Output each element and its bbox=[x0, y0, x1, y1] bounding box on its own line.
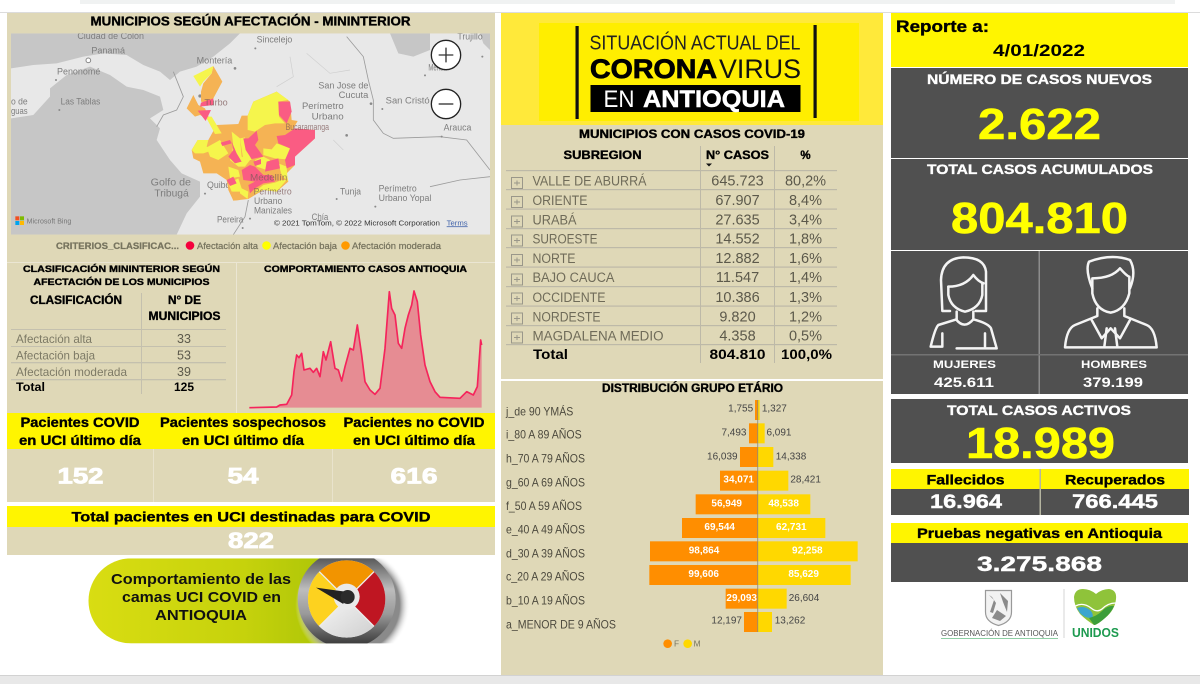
panel: casos acumulados: TOTAL CASOS ACUMULADOS bbox=[927, 162, 1153, 177]
heading: classification: CLASIFICACIÓN MININTERIOR SEGÚN bbox=[23, 263, 220, 275]
chart: age pyramid: 14,338 bbox=[776, 451, 807, 462]
area chart: daily cases bbox=[249, 291, 482, 408]
chart: age pyramid: 28,421 bbox=[790, 474, 821, 485]
table: municipios by class: 125 bbox=[174, 380, 194, 394]
map of Antioquia: guas bbox=[11, 106, 28, 116]
table: subregiones: 1,4% bbox=[789, 270, 822, 286]
panel: pruebas negativas: Pruebas negativas en Antioquia bbox=[917, 525, 1162, 541]
chart: age pyramid: 56,949 bbox=[711, 498, 742, 509]
map of Antioquia: Sincelejo bbox=[257, 35, 292, 45]
chart: age pyramid: d_30 A 39 AÑOS bbox=[506, 547, 585, 560]
table: subregiones: 1,2% bbox=[789, 310, 822, 326]
table: subregiones: ORIENTE bbox=[532, 193, 588, 208]
chart: age pyramid: 7,493 bbox=[721, 427, 747, 438]
map of Antioquia: Las Tablas bbox=[61, 96, 101, 106]
chart: age pyramid: 12,197 bbox=[711, 616, 742, 627]
zoom in button bbox=[431, 40, 461, 70]
map legend: Afectación baja bbox=[273, 241, 338, 252]
heading: map title: MUNICIPIOS SEGÚN AFECTACIÓN - MININTERIOR bbox=[90, 14, 411, 28]
table: subregiones: OCCIDENTE bbox=[532, 290, 606, 305]
map legend: Afectación moderada bbox=[352, 241, 442, 252]
heading: chart: COMPORTAMIENTO CASOS ANTIOQUIA bbox=[264, 264, 467, 275]
panel: gender split bbox=[891, 251, 1188, 394]
icon: coat of arms bbox=[986, 590, 1012, 626]
chart: age pyramid: 69,544 bbox=[704, 522, 735, 533]
table: subregiones: NORDESTE bbox=[532, 310, 600, 324]
table: municipios by class: Afectación baja bbox=[16, 348, 95, 362]
map of Antioquia: San Cristó bbox=[386, 96, 430, 106]
chart: age pyramid: 92,258 bbox=[792, 545, 823, 556]
Antioquia municipalities: Perímetro bbox=[254, 187, 292, 197]
table: subregiones: NORTE bbox=[532, 251, 576, 266]
table: subregiones: 11.547 bbox=[716, 270, 759, 286]
logos: Gobernación de Antioquia and Unidos: GOBERNACIÓN DE ANTIOQUIA bbox=[941, 629, 1059, 638]
panel: pruebas negativas: 3.275.868 bbox=[977, 553, 1102, 576]
chart: age pyramid: 1,327 bbox=[762, 404, 787, 415]
card: pacientes sospechosos: en UCI último día bbox=[182, 432, 304, 448]
table: municipios by class bbox=[11, 293, 226, 394]
page footer strip bbox=[0, 675, 1200, 684]
chart: age pyramid: 29,093 bbox=[726, 593, 757, 604]
map of Antioquia: Cucuta bbox=[339, 90, 368, 100]
title logo: EN bbox=[604, 86, 634, 113]
chart legend: F bbox=[674, 639, 679, 649]
Antioquia municipalities bbox=[187, 66, 329, 201]
table: subregiones: 8,4% bbox=[789, 193, 822, 209]
map of Antioquia: o de bbox=[11, 96, 28, 106]
map of Antioquia: Tribugá bbox=[154, 189, 189, 200]
panel: casos activos: 18.989 bbox=[966, 419, 1115, 468]
table: subregiones: N° CASOS bbox=[706, 150, 769, 162]
table: municipios by class: N° DE bbox=[168, 295, 201, 307]
card: pacientes COVID: en UCI último día bbox=[19, 432, 141, 448]
map of Antioquia: Chía bbox=[312, 212, 328, 222]
panel: casos activos: TOTAL CASOS ACTIVOS bbox=[947, 403, 1131, 418]
chart: age pyramid: b_10 A 19 AÑOS bbox=[506, 594, 585, 607]
panel: casos nuevos bbox=[891, 68, 1188, 158]
map of Antioquia: Perímetro bbox=[302, 101, 344, 111]
title logo: SITUACIÓN ACTUAL DEL bbox=[590, 32, 800, 54]
map of Antioquia: Trujillo bbox=[457, 31, 483, 41]
panel: casos activos bbox=[891, 399, 1188, 468]
map of Antioquia: Mérida bbox=[428, 63, 447, 73]
logos: Gobernación de Antioquia and Unidos bbox=[941, 589, 1119, 640]
map of Antioquia: Arauca bbox=[444, 123, 471, 133]
table: subregiones: 12.882 bbox=[715, 251, 760, 267]
card: pacientes no COVID: en UCI último día bbox=[353, 432, 475, 448]
chart: age pyramid: 6,091 bbox=[766, 427, 792, 438]
banner: camas UCI gauge: ANTIOQUIA bbox=[155, 607, 247, 624]
chart: age pyramid: e_40 A 49 AÑOS bbox=[506, 524, 585, 537]
table: subregiones: MAGDALENA MEDIO bbox=[532, 328, 664, 344]
table: subregiones: 3,4% bbox=[789, 212, 822, 228]
heading: classification: AFECTACIÓN DE LOS MUNICIPIOS bbox=[34, 276, 210, 288]
chart: age pyramid bbox=[505, 400, 858, 649]
table: municipios by class: 53 bbox=[177, 348, 191, 362]
chart: age pyramid: 34,071 bbox=[723, 474, 754, 485]
chart: age pyramid: f_50 A 59 AÑOS bbox=[506, 500, 582, 513]
map of Antioquia: Urbano bbox=[312, 111, 344, 121]
table: subregiones: 804.810 bbox=[710, 347, 766, 362]
card: pacientes sospechosos: Pacientes sospechosos bbox=[160, 414, 326, 430]
table: municipios by class: 39 bbox=[177, 365, 191, 379]
panel: total UCI: Total pacientes en UCI destinadas para COVID bbox=[72, 508, 430, 524]
chart: age pyramid: 16,039 bbox=[707, 451, 738, 462]
table: subregiones: 1,3% bbox=[789, 290, 822, 306]
table: subregiones: 80,2% bbox=[785, 174, 826, 190]
card: pacientes sospechosos: 54 bbox=[228, 464, 259, 488]
panel: total UCI: 822 bbox=[228, 528, 274, 553]
table: municipios by class: Afectación alta bbox=[16, 332, 92, 346]
map of Antioquia: Quibdó bbox=[207, 180, 235, 190]
Microsoft Bing logo bbox=[15, 216, 71, 225]
panel: center column bbox=[501, 13, 883, 675]
title logo bbox=[539, 23, 859, 121]
table: subregiones: 0,5% bbox=[789, 328, 822, 344]
table: subregiones: 1,6% bbox=[789, 251, 822, 267]
map of Antioquia: Manizales bbox=[254, 205, 292, 215]
chart: age pyramid: 26,604 bbox=[789, 593, 820, 604]
card: pacientes no COVID: 616 bbox=[390, 464, 438, 488]
map of Antioquia: Urbano bbox=[254, 196, 282, 206]
panel: municipios map bbox=[7, 13, 495, 262]
table: subregiones: Total bbox=[533, 347, 568, 362]
chart legend bbox=[663, 639, 701, 649]
chart: age pyramid: i_80 A 89 AÑOS bbox=[506, 429, 582, 442]
table: subregiones: 27.635 bbox=[715, 212, 760, 228]
panel: fallecidos y recuperados: 766.445 bbox=[1072, 492, 1159, 513]
map legend: CRITERIOS_CLASIFICAC... bbox=[56, 241, 179, 252]
panel: cases chart bbox=[237, 263, 495, 413]
table: subregiones: 1,8% bbox=[789, 232, 822, 248]
panel: casos nuevos: NÚMERO DE CASOS NUEVOS bbox=[927, 72, 1152, 87]
chart: age pyramid: 85,629 bbox=[788, 569, 819, 580]
table: subregiones: BAJO CAUCA bbox=[532, 270, 614, 285]
banner: camas UCI gauge: camas UCI COVID en bbox=[122, 589, 281, 606]
panel: fallecidos y recuperados: Recuperados bbox=[1065, 472, 1165, 488]
table: subregiones: 9.820 bbox=[719, 310, 756, 326]
Antioquia municipalities: Bucaramanga bbox=[286, 122, 329, 132]
Microsoft Bing logo: Microsoft Bing bbox=[27, 218, 71, 225]
logos: Gobernación de Antioquia and Unidos: UNIDOS bbox=[1072, 626, 1119, 640]
Antioquia municipalities: Turbo bbox=[204, 97, 228, 107]
banner: camas UCI gauge bbox=[88, 558, 408, 644]
panel dividers backing bbox=[7, 262, 495, 413]
title logo: ANTIOQUIA bbox=[643, 86, 785, 113]
panel: report date: 4/01/2022 bbox=[993, 42, 1085, 60]
table: subregiones bbox=[506, 146, 837, 363]
card: pacientes COVID: 152 bbox=[58, 464, 104, 488]
map of Antioquia: Golfo de bbox=[151, 178, 191, 189]
card: pacientes no COVID bbox=[344, 414, 484, 488]
map of Antioquia: Perímetro bbox=[379, 184, 417, 194]
title logo: VIRUS bbox=[719, 54, 801, 84]
table: municipios by class: MUNICIPIOS bbox=[148, 311, 221, 323]
banner: camas UCI gauge: Comportamiento de las bbox=[111, 571, 291, 588]
browser top strip bbox=[0, 0, 1200, 13]
panel: total UCI bbox=[7, 506, 495, 555]
Antioquia municipalities: Medellín bbox=[250, 173, 287, 183]
chart: age pyramid: h_70 A 79 AÑOS bbox=[506, 453, 585, 466]
chart: age pyramid: 13,262 bbox=[775, 616, 806, 627]
map of Antioquia: Urbano Yopal bbox=[379, 193, 431, 203]
map of Antioquia: Panamá bbox=[91, 46, 125, 56]
map of Antioquia: Ciudad de Colón bbox=[77, 31, 144, 41]
heading: classification bbox=[23, 263, 220, 288]
chart: age pyramid: g_60 A 69 AÑOS bbox=[506, 477, 585, 490]
map attribution: Terms bbox=[447, 218, 468, 227]
map legend: Afectación alta bbox=[197, 241, 259, 252]
table: municipios by class: Total bbox=[16, 380, 45, 394]
panel: fallecidos y recuperados: 16.964 bbox=[930, 492, 1003, 513]
heading: age distribution: DISTRIBUCIÓN GRUPO ETÁRIO bbox=[602, 382, 783, 395]
chart: age pyramid: 1,755 bbox=[728, 404, 754, 415]
chart: age pyramid: 99,606 bbox=[688, 569, 719, 580]
table: subregiones: URABÁ bbox=[532, 212, 576, 228]
map legend bbox=[56, 241, 442, 252]
card: pacientes COVID: Pacientes COVID bbox=[20, 414, 140, 430]
panel: casos acumulados bbox=[891, 159, 1188, 250]
table: municipios by class: CLASIFICACIÓN bbox=[30, 294, 122, 307]
map of Antioquia: Montería bbox=[197, 56, 232, 66]
panel: fallecidos y recuperados bbox=[891, 469, 1189, 515]
table: subregiones: % bbox=[800, 150, 811, 162]
map of Antioquia: Penonomé bbox=[57, 66, 100, 76]
panel: classification table bbox=[7, 263, 236, 413]
card: pacientes sospechosos bbox=[160, 414, 326, 488]
icon: woman bbox=[931, 257, 997, 348]
map of Antioquia bbox=[11, 31, 490, 235]
map of Antioquia: San Jose de bbox=[318, 80, 368, 90]
panel: casos nuevos: 2.622 bbox=[978, 100, 1101, 149]
panel: gender split: MUJERES bbox=[933, 359, 996, 371]
panel: UCI patients bbox=[7, 413, 495, 502]
table: subregiones: 10.386 bbox=[715, 290, 760, 306]
zoom out button bbox=[431, 89, 461, 119]
card: pacientes COVID bbox=[19, 414, 141, 488]
panel: gender split: 379.199 bbox=[1083, 375, 1143, 390]
panel: report date: Reporte a: bbox=[896, 18, 989, 36]
chart: age pyramid: 98,864 bbox=[689, 545, 720, 556]
table: municipios by class: Afectación moderada bbox=[16, 365, 127, 379]
map of Antioquia: Pereira bbox=[217, 215, 243, 225]
table: subregiones: 4.358 bbox=[719, 328, 756, 344]
panel: casos acumulados: 804.810 bbox=[951, 194, 1128, 243]
panel: report date bbox=[891, 13, 1188, 67]
table: subregiones: 14.552 bbox=[715, 232, 760, 248]
chart: age pyramid: j_de 90 YMÁS bbox=[505, 406, 574, 419]
panel: gender split: HOMBRES bbox=[1081, 359, 1147, 371]
icon: Unidos heart bbox=[1074, 589, 1116, 625]
panel: gender split: 425.611 bbox=[934, 375, 995, 390]
title logo: CORONA bbox=[590, 54, 717, 84]
chart: age pyramid: a_MENOR DE 9 AÑOS bbox=[506, 618, 616, 631]
panel: pruebas negativas bbox=[891, 523, 1188, 582]
map attribution: © 2021 TomTom, © 2022 Microsoft Corporation bbox=[274, 218, 440, 227]
table: subregiones: VALLE DE ABURRÁ bbox=[532, 174, 646, 188]
icon: man bbox=[1065, 257, 1157, 347]
table: subregiones: 67.907 bbox=[715, 193, 760, 209]
panel: fallecidos y recuperados: Fallecidos bbox=[926, 472, 1005, 488]
table: subregiones: SUROESTE bbox=[532, 232, 598, 246]
chart: age pyramid: c_20 A 29 AÑOS bbox=[506, 571, 585, 584]
table: municipios by class: 33 bbox=[177, 332, 191, 346]
table: subregiones: 645.723 bbox=[711, 174, 764, 190]
table: subregiones: SUBREGION bbox=[564, 150, 642, 162]
map of Antioquia: Tunja bbox=[340, 186, 361, 196]
chart: age pyramid: 62,731 bbox=[776, 522, 807, 533]
chart legend: M bbox=[694, 639, 701, 649]
heading: municipios con casos: MUNICIPIOS CON CASOS COVID-19 bbox=[579, 129, 805, 141]
chart: age pyramid: 48,538 bbox=[768, 498, 799, 509]
card: pacientes no COVID: Pacientes no COVID bbox=[344, 414, 484, 430]
table: subregiones: 100,0% bbox=[781, 347, 832, 362]
